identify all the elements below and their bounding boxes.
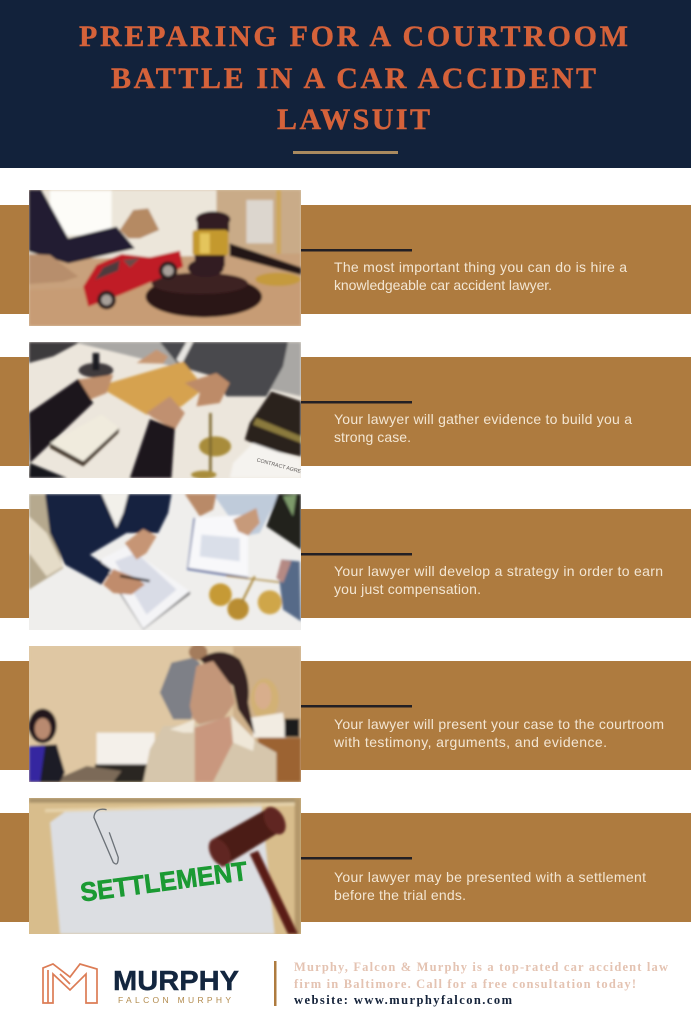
footer divider — [274, 961, 276, 1006]
step 2 text: Your lawyer will gather evidence to build you a — [334, 411, 632, 427]
step 1 text: The most important thing you can do is hire a — [334, 259, 627, 275]
title: LAWSUIT — [277, 103, 430, 136]
step 5 text: Your lawyer may be presented with a settlement — [334, 869, 646, 885]
step 5 text — [334, 869, 646, 903]
connector line 2 — [301, 401, 412, 404]
step 1 text: knowledgeable car accident lawyer. — [334, 277, 552, 293]
connector line 1 — [301, 249, 412, 252]
logo wordmark: MURPHY — [113, 965, 239, 996]
title: PREPARING FOR A COURTROOM — [79, 20, 628, 53]
header banner — [0, 0, 691, 168]
step 2 text: strong case. — [334, 429, 411, 445]
photo: handing over envelope — [29, 342, 320, 480]
panel: step 3 band — [0, 509, 691, 618]
footer text: Murphy, Falcon & Murphy is a top-rated car accident law — [294, 960, 668, 974]
photo: toy car and gavel — [29, 190, 301, 326]
step 4 text: with testimony, arguments, and evidence. — [333, 734, 607, 750]
title underline — [293, 151, 398, 154]
logo subline: FALCON MURPHY — [118, 995, 231, 1005]
connector line 4 — [301, 705, 412, 708]
title: BATTLE IN A CAR ACCIDENT — [111, 62, 596, 95]
step 3 text: Your lawyer will develop a strategy in order to earn — [334, 563, 663, 579]
logo — [43, 964, 239, 1005]
panel: step 4 band — [0, 661, 691, 770]
connector line 5 — [301, 857, 412, 860]
title — [79, 20, 628, 136]
connector line 3 — [301, 553, 412, 556]
photo: settlement paper with gavel — [29, 798, 301, 934]
step 1 text — [334, 259, 627, 293]
footer text — [294, 960, 668, 1007]
panel: step 1 band — [0, 205, 691, 314]
footer text: website: www.murphyfalcon.com — [294, 993, 513, 1007]
photo: signing documents — [29, 494, 301, 630]
footer — [43, 960, 668, 1007]
step 3 text: you just compensation. — [334, 581, 481, 597]
settlement label: SETTLEMENT — [78, 856, 249, 908]
step 2 text — [334, 411, 632, 445]
footer text: firm in Baltimore. Call for a free consultation today! — [294, 977, 636, 991]
step 3 text — [334, 563, 663, 597]
step 5 text: before the trial ends. — [334, 887, 466, 903]
step 4 text — [333, 716, 664, 750]
step 4 text: Your lawyer will present your case to the courtroom — [334, 716, 664, 732]
photo: courtroom witness — [29, 644, 301, 782]
panel: step 2 band — [0, 357, 691, 466]
icon: M monogram — [43, 964, 97, 1003]
panel: step 5 band — [0, 813, 691, 922]
photo: handing over envelope: CONTRACT AGREEMENT — [256, 457, 320, 480]
